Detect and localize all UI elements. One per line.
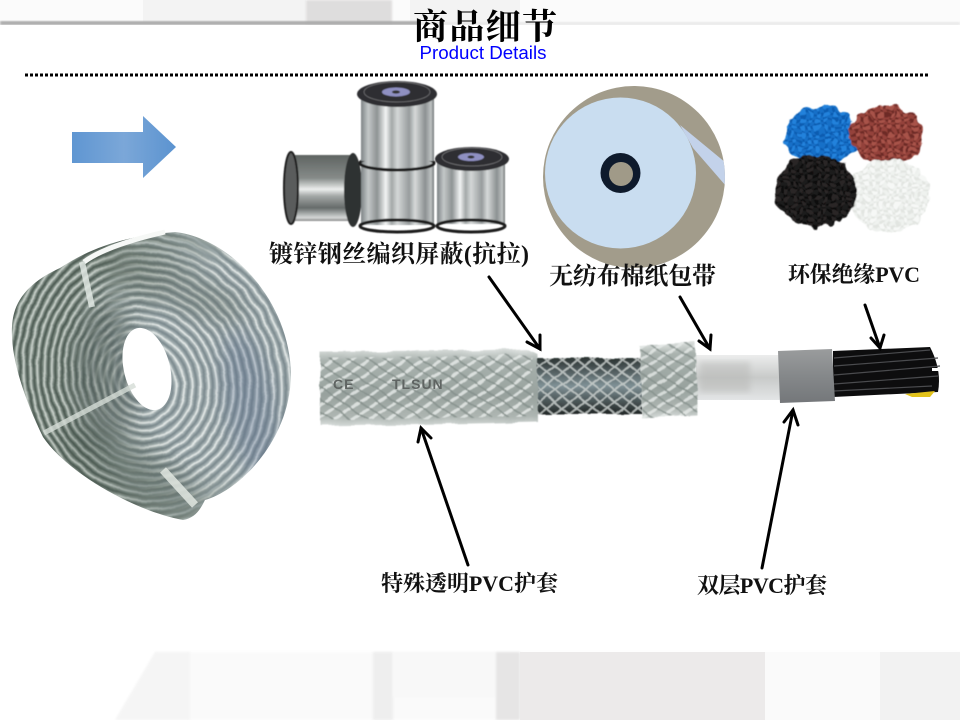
label: double-layer PVC jacket: 双层PVC护套 <box>697 573 827 598</box>
white pellets <box>848 160 930 232</box>
image: non-woven tape roll <box>543 86 726 268</box>
label: eco PVC insulation: 环保绝缘PVC <box>788 262 920 287</box>
blue pellets <box>785 106 857 166</box>
image: galvanized wire spools <box>284 81 509 232</box>
right spool <box>435 147 509 232</box>
coil centre hole <box>115 323 179 415</box>
coil side strap <box>82 262 92 307</box>
tape strip <box>680 125 726 186</box>
coil bottom strap <box>163 470 195 505</box>
exposed braid <box>530 358 642 414</box>
bottom centre spool <box>360 156 434 232</box>
black conductors <box>833 347 940 397</box>
arrow: to braid shielding <box>489 277 540 349</box>
top spool <box>357 81 437 161</box>
red pellets <box>851 106 923 166</box>
subtitle: Product Details <box>420 43 546 63</box>
image: PVC pellets <box>775 106 930 232</box>
arrow: to tape <box>680 297 711 349</box>
tape core <box>600 153 640 193</box>
grey inner jacket <box>778 349 835 403</box>
arrow: to insulation <box>865 305 884 348</box>
black pellets <box>775 155 857 227</box>
coil lower strap <box>44 385 135 433</box>
image: cable cross-section <box>320 342 940 426</box>
title: 商品细节 <box>413 8 557 47</box>
outer transparent jacket <box>320 349 538 426</box>
image: cable coil <box>12 230 291 520</box>
bottom decorative band <box>115 652 960 720</box>
left lying spool <box>284 152 362 227</box>
label: transparent PVC jacket: 特殊透明PVC护套 <box>381 571 558 596</box>
label: non-woven tape: 无纺布棉纸包带 <box>549 262 716 290</box>
image: cable cross-section: TLSUN <box>392 376 444 392</box>
label: galvanized steel braid: 镀锌钢丝编织屏蔽(抗拉) <box>269 241 529 268</box>
arrow: to transparent jacket <box>418 428 468 565</box>
dotted divider <box>25 74 928 76</box>
tape disc <box>545 98 696 248</box>
coil top strap <box>84 232 165 262</box>
top decorative band <box>0 0 960 31</box>
cotton paper layer <box>696 355 780 400</box>
icon: blue arrow <box>72 116 176 178</box>
jacket print: CE <box>333 376 354 392</box>
second transparent sleeve <box>640 342 698 418</box>
arrow: to double-layer jacket <box>762 410 798 568</box>
